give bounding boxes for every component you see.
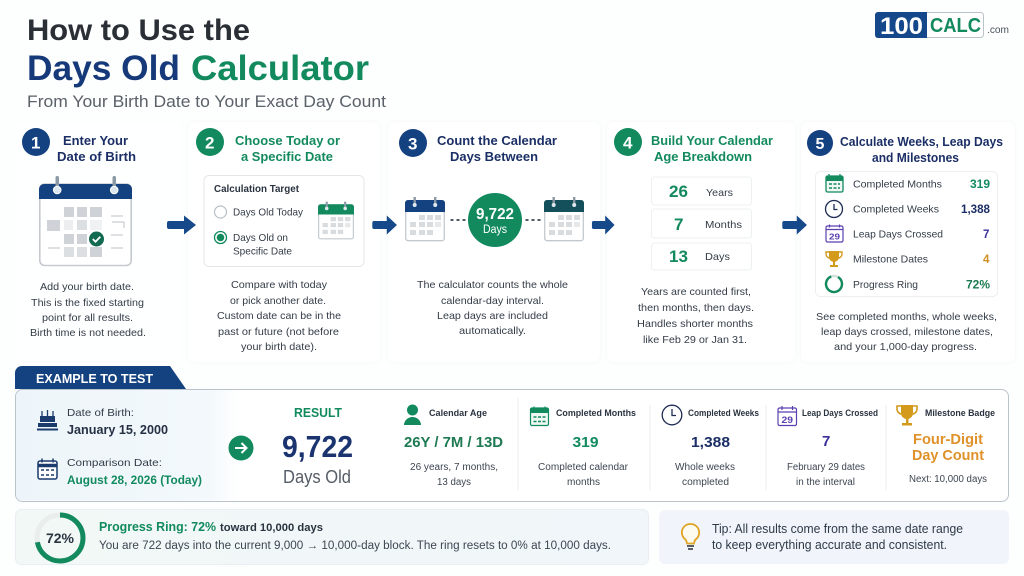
- row: days: Days: [705, 251, 730, 263]
- tip text: to keep everything accurate and consistent.: [712, 538, 947, 552]
- text block: step 1: Birth time is not needed.: [30, 327, 146, 339]
- text block: step 1: Add your birth date.: [40, 281, 134, 293]
- icon: birthday cake: [37, 410, 58, 430]
- heading: enter your date of birth: Enter Your: [63, 133, 128, 148]
- text block: step 2: [217, 279, 341, 353]
- text block: step 2: your birth date).: [241, 341, 317, 353]
- icon: person: [404, 404, 421, 425]
- heading: count the calendar days between: Days Between: [450, 149, 538, 164]
- metric: leap days crossed: in the interval: [796, 477, 855, 488]
- step number 2: 2: [205, 134, 214, 152]
- heading: calculate weeks, leap days and milestones: [840, 134, 1003, 165]
- panel: tip: [659, 510, 1009, 564]
- icon: mini calendar: [318, 202, 354, 239]
- step number 5: [807, 130, 833, 156]
- metric: leap days crossed: Leap Days Crossed: [802, 408, 878, 419]
- row: milestone dates: Milestone Dates: [853, 254, 928, 266]
- title: How to Use the: [27, 14, 250, 47]
- heading: count the calendar days between: Count the Calendar: [437, 133, 557, 148]
- metric: calendar age: 13 days: [437, 477, 471, 488]
- metric: completed months: 319: [572, 434, 598, 451]
- step number 2: [196, 128, 224, 156]
- progress ring 72%: [37, 515, 83, 561]
- result: RESULT: [294, 405, 342, 420]
- result: Days Old: [283, 467, 351, 487]
- text block: step 2: Compare with today: [231, 279, 328, 291]
- metric: completed months: Completed Months: [556, 408, 636, 419]
- row: months: [652, 209, 752, 238]
- metric: milestone badge: Next: 10,000 days: [909, 474, 987, 485]
- step number 4: 4: [623, 134, 633, 152]
- metric: milestone badge: Four-Digit: [913, 431, 983, 448]
- text block: step 4: Handles shorter months: [637, 318, 753, 330]
- radio: days old on specific date: [214, 232, 292, 258]
- row: years: Years: [706, 187, 733, 199]
- metric: completed weeks: [662, 405, 759, 488]
- row: progress ring: 72%: [966, 280, 990, 292]
- icon: leap day calendar: 29: [782, 415, 793, 425]
- panel: progress ring: [16, 510, 648, 564]
- heading: calculate weeks, leap days and milestones: Calculate Weeks, Leap Days: [840, 134, 1003, 149]
- row: months: 7: [674, 215, 683, 234]
- row: completed months: Completed Months: [853, 178, 942, 190]
- arrow 4 to 5: [782, 216, 807, 234]
- metric: completed weeks: 1,388: [691, 434, 730, 451]
- row: completed months: 319: [970, 179, 990, 191]
- progress text: You are 722 days into the current 9,000 → 10,000-day block. The ring resets to 0% at 10,000 days.: [99, 540, 611, 552]
- row: progress ring: [823, 273, 990, 295]
- row: completed months: [826, 174, 990, 192]
- text block: step 3: calendar-day interval.: [441, 295, 544, 307]
- metric: leap days crossed: February 29 dates: [787, 462, 865, 473]
- metric: leap days crossed: 7: [822, 433, 830, 450]
- text block: step 2: Custom date can be in the: [217, 310, 341, 322]
- metric: completed months: [530, 406, 636, 488]
- text block: step 1: point for all results.: [42, 312, 133, 324]
- dots left: [450, 219, 466, 221]
- heading: choose today or a specific date: Choose Today or: [235, 133, 340, 148]
- panel: step 2 choose date: [188, 122, 380, 362]
- row: leap days crossed: 7: [983, 229, 989, 241]
- panel: step 1 enter date of birth: [15, 122, 181, 362]
- row: completed weeks: Completed Weeks: [853, 204, 939, 216]
- heading: enter your date of birth: Date of Birth: [57, 149, 136, 164]
- panel: step 4 age breakdown: [607, 122, 795, 362]
- text block: step 2: or pick another date.: [230, 295, 326, 307]
- card: calculation target: Calculation Target: [214, 184, 300, 195]
- comparison date: [67, 457, 202, 487]
- title: [27, 14, 369, 88]
- progress text: Progress Ring: 72%: [99, 520, 216, 534]
- row: years: 26: [669, 182, 688, 201]
- metric: completed weeks: completed: [682, 477, 729, 488]
- birth date: January 15, 2000: [67, 423, 168, 437]
- icon: start calendar: [405, 197, 445, 241]
- text block: step 5: leap days crossed, milestone dates,: [821, 326, 993, 338]
- heading: enter your date of birth: [57, 133, 136, 164]
- text block: step 2: past or future (not before: [218, 326, 339, 338]
- text block: step 3: The calculator counts the whole: [417, 279, 568, 291]
- step number 4: [614, 128, 642, 156]
- title: Days Old: [27, 49, 180, 88]
- tab: example to test: EXAMPLE TO TEST: [36, 371, 153, 386]
- metric: completed months: months: [567, 477, 600, 488]
- heading: build your calendar age breakdown: [651, 133, 773, 164]
- text block: step 3: automatically.: [459, 325, 526, 337]
- tab: example to test: [15, 366, 186, 389]
- metric: calendar age: 26Y / 7M / 13D: [404, 434, 503, 451]
- row: leap days crossed: 29: [829, 232, 840, 242]
- text block: step 3: Leap days are included: [437, 310, 548, 322]
- icon: clock: [662, 405, 682, 425]
- progress text: toward 10,000 days: [220, 522, 323, 534]
- panel: step 5 weeks, leap days, milestones: [801, 122, 1015, 362]
- subtitle: From Your Birth Date to Your Exact Day Count: [27, 92, 386, 111]
- row: completed weeks: [826, 200, 991, 218]
- badge: 9,722 days: [468, 193, 522, 247]
- metric: leap days crossed: [778, 406, 878, 488]
- icon: comparison calendar: [38, 458, 57, 479]
- text block: step 4: like Feb 29 or Jan 31.: [643, 334, 747, 346]
- result: 9,722: [282, 429, 353, 464]
- step number 3: [399, 129, 427, 157]
- row: days: 13: [669, 247, 688, 266]
- card: calculation target: [204, 176, 364, 266]
- metric: completed months: Completed calendar: [538, 462, 629, 473]
- logo: .com: [987, 25, 1009, 36]
- metric: milestone badge: Milestone Badge: [925, 408, 995, 419]
- logo: [875, 12, 1009, 40]
- icon: green calendar: [530, 406, 548, 426]
- title: Calculator: [191, 49, 369, 88]
- text block: step 4: then months, then days.: [638, 302, 754, 314]
- radio: days old today: Days Old Today: [233, 206, 304, 218]
- heading: choose today or a specific date: [235, 133, 340, 164]
- metric: calendar age: 26 years, 7 months,: [410, 462, 498, 473]
- row: months: Months: [705, 219, 742, 231]
- text block: step 5: and your 1,000-day progress.: [834, 341, 977, 353]
- step number 5: 5: [816, 136, 824, 153]
- icon: end calendar: [544, 197, 584, 241]
- icon: light bulb: [682, 524, 699, 550]
- step number 3: 3: [408, 134, 417, 154]
- progress ring 72%: 72%: [46, 530, 75, 546]
- birth date: [67, 407, 168, 437]
- metric: completed weeks: Completed Weeks: [688, 408, 759, 419]
- comparison date: Comparison Date:: [67, 457, 162, 469]
- heading: build your calendar age breakdown: Age Breakdown: [654, 149, 752, 164]
- tip text: Tip: All results come from the same date range: [712, 522, 963, 536]
- row: milestone dates: [826, 251, 990, 267]
- row: years: [652, 177, 752, 205]
- metric: completed weeks: Whole weeks: [675, 462, 735, 473]
- text block: step 4: [637, 286, 754, 346]
- text block: step 4: Years are counted first,: [641, 286, 751, 298]
- text block: step 1: [30, 281, 146, 339]
- result: [282, 405, 353, 487]
- row: leap days crossed: [826, 224, 989, 242]
- birth date: Date of Birth:: [67, 407, 134, 419]
- text block: step 1: This is the fixed starting: [31, 297, 144, 309]
- arrow 3 to 4: [592, 216, 615, 234]
- step number 1: 1: [31, 134, 40, 152]
- metric: milestone badge: [897, 405, 995, 485]
- step number 1: [22, 128, 50, 156]
- badge: 9,722 days: Days: [483, 224, 507, 236]
- row: completed weeks: 1,388: [961, 204, 991, 216]
- heading: calculate weeks, leap days and milestones: and Milestones: [872, 150, 959, 165]
- metric: milestone badge: Day Count: [912, 447, 984, 464]
- progress text: [99, 520, 611, 552]
- logo: 100: [880, 13, 923, 40]
- dots right: [526, 219, 540, 221]
- panel: step 3 count days: [388, 122, 600, 362]
- text block: step 3: [417, 279, 568, 337]
- panel: example to test: [15, 366, 1008, 502]
- badge: 9,722 days: 9,722: [476, 206, 514, 223]
- text block: step 5: [816, 311, 997, 353]
- tip text: [712, 522, 963, 552]
- radio: days old on specific date: Specific Date: [233, 246, 292, 258]
- heading: count the calendar days between: [437, 133, 557, 164]
- icon: large calendar with check: [39, 176, 132, 266]
- arrow 1 to 2: [167, 216, 196, 234]
- text block: step 5: See completed months, whole weeks,: [816, 311, 997, 323]
- logo: CALC: [930, 15, 981, 37]
- icon: trophy: [897, 405, 917, 426]
- results table: [816, 172, 998, 296]
- arrow 2 to 3: [372, 216, 397, 234]
- metric: calendar age: [404, 404, 503, 488]
- row: leap days crossed: Leap Days Crossed: [853, 228, 943, 240]
- row: days: [652, 243, 752, 270]
- icon: arrow circle: [228, 436, 254, 460]
- row: progress ring: Progress Ring: [853, 279, 918, 291]
- comparison date: August 28, 2026 (Today): [67, 473, 202, 487]
- radio: days old on specific date: Days Old on: [233, 232, 288, 244]
- row: milestone dates: 4: [983, 254, 990, 266]
- heading: build your calendar age breakdown: Build Your Calendar: [651, 133, 773, 148]
- heading: choose today or a specific date: a Specific Date: [241, 149, 333, 164]
- metric: calendar age: Calendar Age: [429, 408, 487, 419]
